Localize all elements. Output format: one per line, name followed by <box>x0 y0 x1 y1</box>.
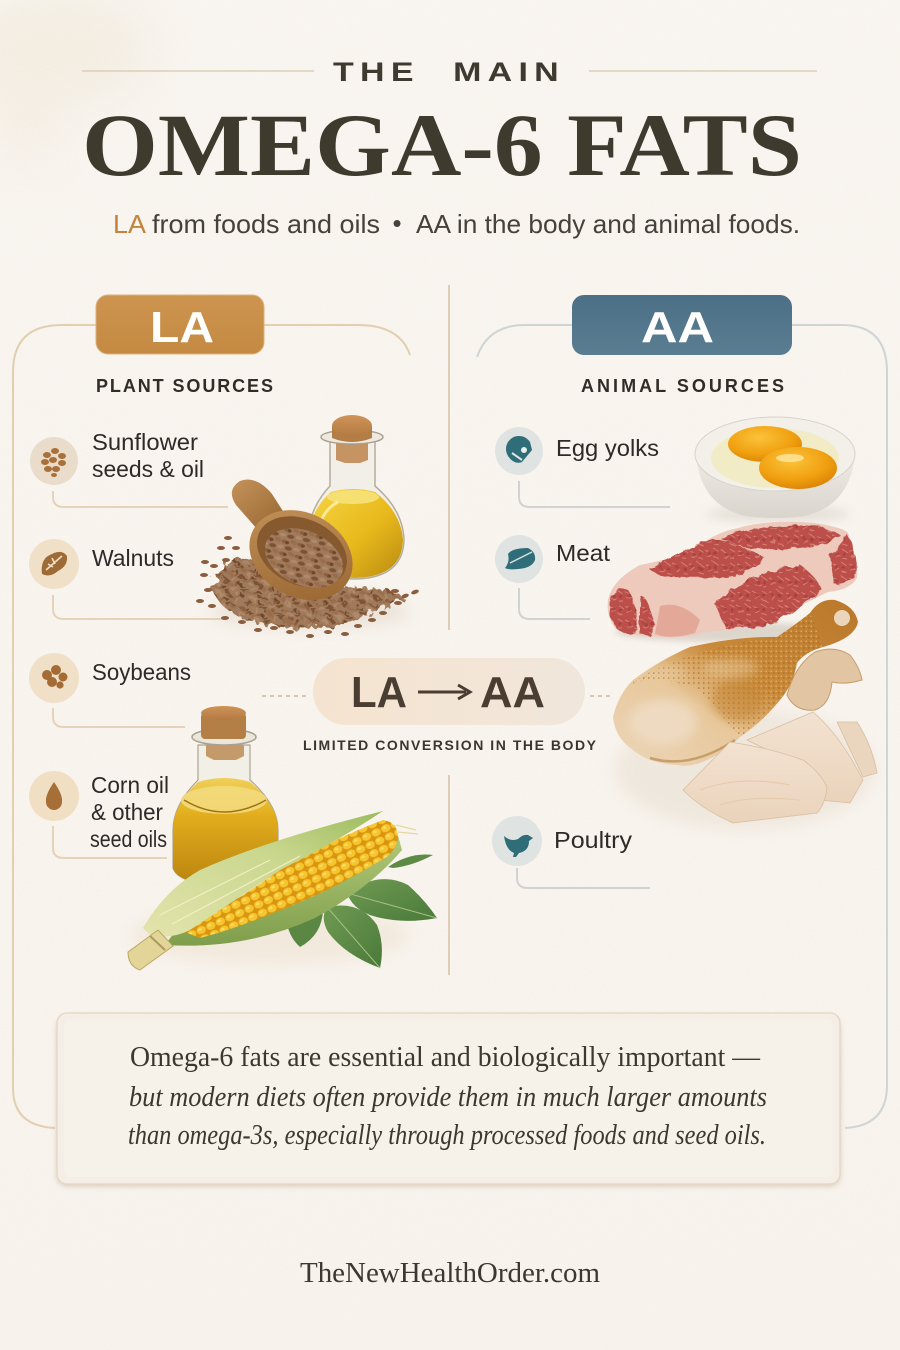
item: poultry: Poultry <box>554 827 633 853</box>
illustration: seeds, scoop and oil bottle <box>196 415 419 638</box>
heading: omega-6 fats: OMEGA-6 FATS <box>82 97 802 195</box>
item: corn oil: seed oils <box>90 826 167 852</box>
meat slices <box>837 722 877 777</box>
item: sunflower seeds: seeds & oil <box>92 456 204 482</box>
callout box: than omega-3s, especially through processed foods and seed oils. <box>128 1119 766 1151</box>
item: walnuts <box>29 539 225 619</box>
pill <box>313 658 585 725</box>
panel: LA plant sources <box>13 295 410 1128</box>
illustration: chicken <box>613 600 877 823</box>
item: corn oil: Corn oil <box>91 772 169 798</box>
item: sunflower seeds <box>30 429 228 507</box>
illustration: chicken, dust shadow <box>615 710 875 830</box>
icon: seed pile <box>196 536 419 638</box>
subtitle: AA in the body and animal foods. <box>416 209 800 239</box>
item: meat <box>495 535 611 619</box>
icon: leaves <box>287 854 437 968</box>
item: egg yolks: Egg yolks <box>556 435 659 461</box>
icon: oil bottle <box>173 706 278 886</box>
subtitle: • <box>392 208 402 238</box>
conversion callout <box>262 658 612 753</box>
center divider <box>448 285 450 975</box>
illustration: corn and oil bottle <box>128 706 437 970</box>
badge: LA: LA <box>150 303 214 352</box>
heading: plant sources: PLANT SOURCES <box>96 376 273 396</box>
callout box: but modern diets often provide them in much larger amounts <box>129 1081 767 1113</box>
panel: AA animal sources <box>477 295 887 1128</box>
label: LA to AA: LA <box>351 668 407 717</box>
item: corn oil: & other <box>91 799 163 825</box>
item: sunflower seeds: Sunflower <box>92 429 198 455</box>
footer: website: TheNewHealthOrder.com <box>300 1258 600 1289</box>
badge: LA <box>96 295 264 354</box>
item: walnuts: Walnuts <box>92 545 174 571</box>
icon: corn cob <box>128 811 418 970</box>
item: meat: Meat <box>556 540 611 566</box>
item: soybeans <box>29 653 191 727</box>
subtitle <box>113 208 800 239</box>
heading: animal sources: ANIMAL SOURCES <box>581 376 784 396</box>
callout box: Omega-6 fats are essential and biologically important — <box>130 1041 761 1073</box>
item: corn oil <box>29 771 169 858</box>
callout box <box>57 1013 840 1186</box>
subtitle: LA from foods and oils <box>113 209 380 239</box>
illustration: meat steak <box>608 522 857 642</box>
item: egg yolks <box>495 427 670 507</box>
icon: oil bottle <box>307 415 404 579</box>
kicker: the main: THE MAIN <box>333 57 565 87</box>
illustration: egg bowl <box>695 417 855 521</box>
label: LA to AA: AA <box>480 668 545 717</box>
caption: limited conversion: LIMITED CONVERSION IN THE BODY <box>303 737 597 753</box>
drumstick <box>613 600 858 766</box>
title block <box>82 57 817 239</box>
badge: AA <box>572 295 792 355</box>
item: soybeans: Soybeans <box>92 659 191 685</box>
badge: AA: AA <box>641 303 714 352</box>
icon: wooden scoop <box>232 480 368 617</box>
label: LA to AA <box>351 668 545 717</box>
item: poultry <box>492 816 650 888</box>
nugget <box>787 649 862 710</box>
